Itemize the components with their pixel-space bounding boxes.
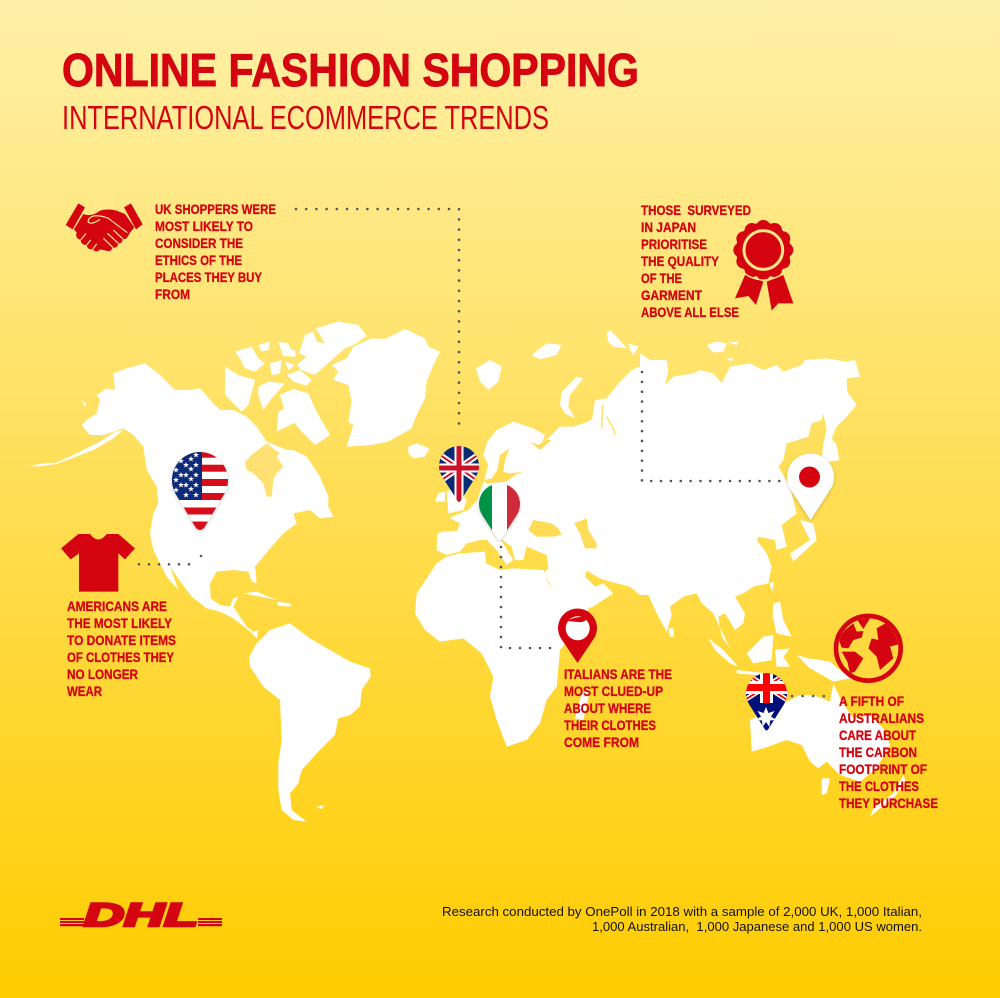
text: Italians: ITALIANS ARE THE [564, 666, 672, 682]
text: UK shoppers: PLACES THEY BUY [155, 269, 263, 285]
map: Americas [29, 363, 429, 822]
map: Eurasia, Africa and Indonesia [415, 330, 860, 747]
text: Australians: AUSTRALIANS [839, 710, 924, 726]
map: inland seas [483, 440, 597, 548]
text: Australians: THE CLOTHES [839, 778, 919, 794]
pin: Japan flag [787, 453, 834, 520]
text: Americans: OF CLOTHES THEY [67, 649, 175, 665]
text: Americans: AMERICANS ARE [67, 598, 167, 614]
pin: USA flag [170, 450, 230, 535]
pin: Australia flag [746, 673, 787, 730]
subtitle: INTERNATIONAL ECOMMERCE TRENDS [62, 100, 549, 137]
text: Japan: THE QUALITY [641, 253, 720, 269]
dotted connector: US [139, 546, 201, 564]
pin: red location marker [558, 609, 597, 663]
text: Italians [564, 666, 672, 750]
text: Americans: NO LONGER [67, 666, 138, 682]
text: Japan: PRIORITISE [641, 236, 707, 252]
pin: Italy flag [478, 483, 522, 542]
text: Americans: TO DONATE ITEMS [67, 632, 176, 648]
text: Japan: GARMENT [641, 287, 702, 303]
text: Italians: THEIR CLOTHES [564, 717, 656, 733]
text: Italians: COME FROM [564, 734, 639, 750]
text: UK shoppers: MOST LIKELY TO [155, 218, 253, 234]
footnote: research source [442, 904, 922, 934]
icon: rosette [733, 220, 793, 311]
icon: t-shirt [61, 534, 135, 592]
text: UK shoppers: ETHICS OF THE [155, 252, 242, 268]
text: Americans: WEAR [67, 683, 102, 699]
text: Japan: IN JAPAN [641, 219, 696, 235]
text: Japan [641, 202, 751, 320]
footnote: research source: 1,000 Australian, 1,000 Japanese and 1,000 US women. [592, 919, 922, 934]
text: Americans: THE MOST LIKELY [67, 615, 173, 631]
text: Americans [67, 598, 176, 699]
text: Australians: THE CARBON [839, 744, 917, 760]
text: Japan: ABOVE ALL ELSE [641, 304, 739, 320]
text: Australians: THEY PURCHASE [839, 795, 938, 811]
icon: handshake [66, 203, 143, 251]
text: Japan: OF THE [641, 270, 682, 286]
text: Italians: MOST CLUED-UP [564, 683, 663, 699]
pin: UK flag [439, 446, 479, 502]
text: Japan: THOSE SURVEYED [641, 202, 751, 218]
text: UK shoppers [155, 201, 276, 302]
map: Arctic Canada and Greenland [225, 322, 440, 447]
text: UK shoppers: CONSIDER THE [155, 235, 243, 251]
text: Italians: ABOUT WHERE [564, 700, 651, 716]
dotted connector: Italy [501, 547, 551, 648]
logo: DHL: DHL [84, 897, 198, 933]
footnote: research source: Research conducted by OnePoll in 2018 with a sample of 2,000 UK, 1,000 Italian, [442, 904, 922, 919]
text: Australians [839, 693, 938, 811]
icon: globe [836, 615, 901, 681]
text: UK shoppers: UK SHOPPERS WERE [155, 201, 276, 217]
text: Australians: A FIFTH OF [839, 693, 904, 709]
title: ONLINE FASHION SHOPPING [62, 44, 639, 96]
world map [29, 322, 906, 822]
map: Australia and New Zealand [750, 655, 906, 817]
dotted connector: UK [296, 209, 459, 433]
text: Australians: CARE ABOUT [839, 727, 916, 743]
dotted connector: Japan [642, 372, 780, 481]
text: Australians: FOOTPRINT OF [839, 761, 927, 777]
text: UK shoppers: FROM [155, 286, 190, 302]
dotted connector: Australia [792, 695, 824, 697]
